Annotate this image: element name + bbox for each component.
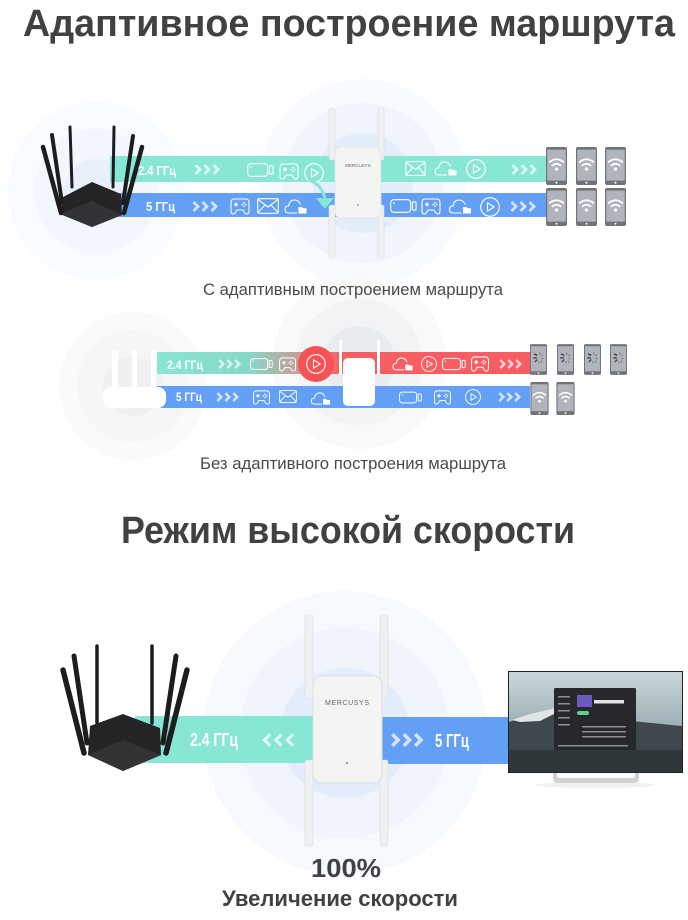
tv: monitor with music app <box>508 671 683 788</box>
title: adaptive routing: Адаптивное построение маршрута <box>23 3 676 45</box>
label: 5 GHz: 5 ГГц <box>176 390 203 404</box>
extender: white silhouette <box>339 340 380 406</box>
extender: white: MERCUSYS <box>345 163 371 168</box>
stat: 100%: 100% <box>311 853 381 883</box>
signal rings: extender <box>203 591 487 875</box>
label: 2.4 GHz: 2.4 ГГц <box>190 730 238 750</box>
caption: without adaptive routing: Без адаптивного построения маршрута <box>200 454 507 473</box>
arrows: downlink direction <box>392 734 421 746</box>
congestion marker: red circle <box>298 346 334 382</box>
band bar: 5 GHz <box>157 386 530 408</box>
label: 2.4 GHz: 2.4 ГГц <box>138 163 176 178</box>
icons: 2.4 GHz traffic, left <box>219 358 295 371</box>
router: black six antenna <box>63 646 187 771</box>
phones: connected devices <box>530 382 575 415</box>
band bar: 5 GHz <box>382 717 508 764</box>
stat label: speed increase: Увеличение скорости <box>222 886 458 911</box>
icons: 5 GHz traffic, right <box>391 198 534 216</box>
icons: 2.4 GHz traffic, left <box>196 164 323 182</box>
arrow: band switch <box>308 180 334 209</box>
icons: 5 GHz traffic, right <box>400 390 519 404</box>
extender: white <box>305 615 388 846</box>
signal rings: extender <box>259 79 467 287</box>
icons: 2.4 GHz traffic, right <box>406 160 535 178</box>
diagram: without adaptive routing <box>59 275 627 460</box>
arrows: uplink direction <box>264 734 293 746</box>
icons: 5 GHz traffic, left <box>217 391 330 405</box>
band bar: overloaded 2.4 GHz <box>157 352 530 374</box>
band bar: 5 GHz <box>118 193 546 217</box>
diagram: with adaptive routing <box>7 79 626 287</box>
heading: high speed mode: Режим высокой скорости <box>121 510 575 552</box>
label: 5 GHz: 5 ГГц <box>435 731 469 751</box>
signal rings: router <box>59 312 207 460</box>
signal rings: extender <box>272 275 446 449</box>
diagram: high speed mode <box>63 591 683 875</box>
band bar: 2.4 GHz <box>135 716 313 763</box>
router: white silhouette <box>103 350 166 408</box>
router: black six antenna <box>43 127 142 227</box>
caption: with adaptive routing: С адаптивным построением маршрута <box>203 280 504 299</box>
band bar: 2.4 GHz <box>110 156 546 182</box>
extender: white: MERCUSYS <box>325 700 369 707</box>
extender: white <box>329 108 384 258</box>
signal rings: router <box>7 102 185 280</box>
icons: red traffic <box>393 357 520 371</box>
phones: stalled devices <box>530 344 627 375</box>
label: 2.4 GHz: 2.4 ГГц <box>167 358 204 372</box>
icons: 5 GHz traffic, left <box>194 199 306 214</box>
label: 5 GHz: 5 ГГц <box>146 199 175 214</box>
phones: connected devices <box>546 147 626 226</box>
